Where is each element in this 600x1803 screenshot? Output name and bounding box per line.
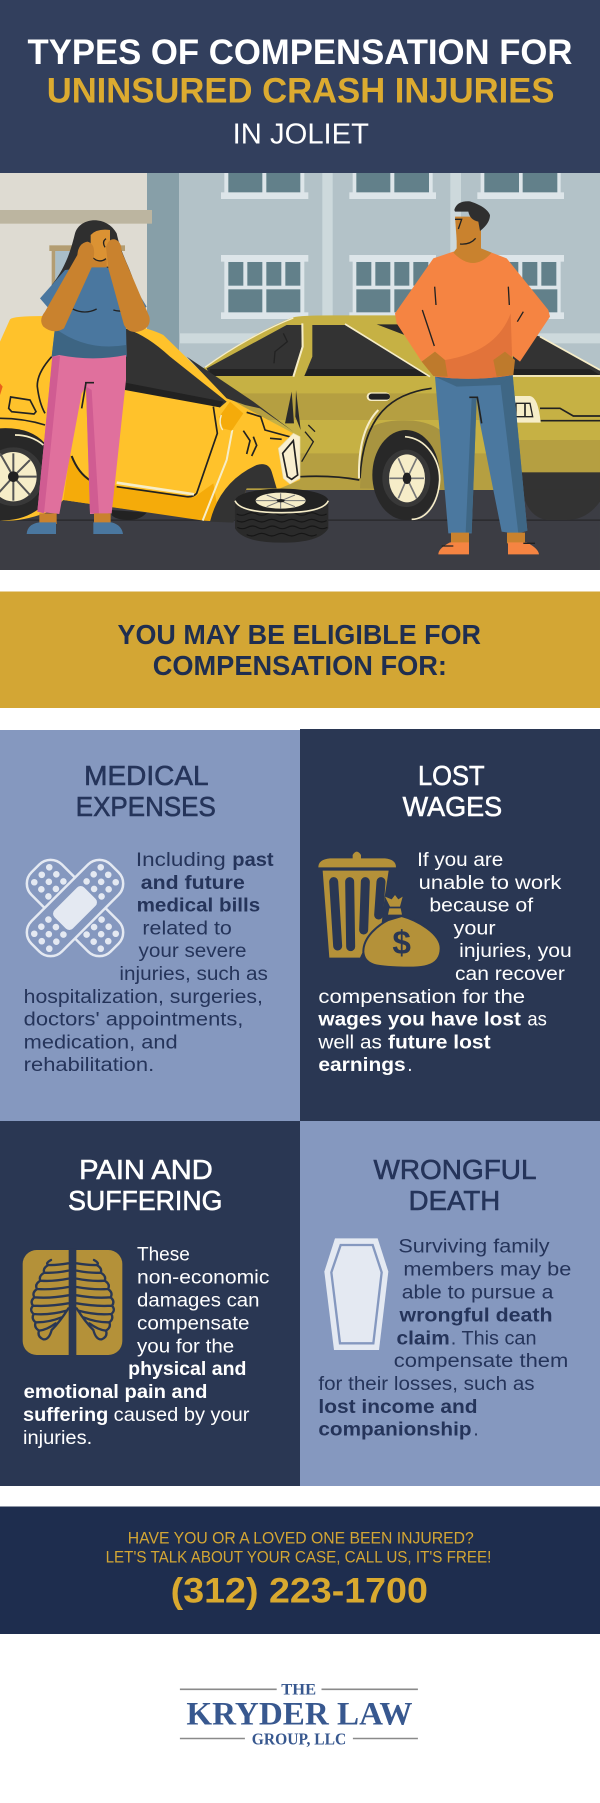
text: wrongful death: members may be <box>403 1260 571 1281</box>
heading: lost wages <box>403 760 502 822</box>
icon: trash can and money bag <box>318 852 441 968</box>
text: pain and suffering: non-economic <box>137 1268 269 1289</box>
phone number: (312) 223-1700 <box>171 1572 428 1611</box>
call to action panel <box>0 1506 600 1634</box>
title: IN JOLIET <box>233 119 369 151</box>
text: medical expenses: medication, and <box>24 1032 178 1053</box>
damage cracks <box>285 390 301 430</box>
heading: pain and suffering <box>68 1154 222 1216</box>
call to action text: HAVE YOU OR A LOVED ONE BEEN INJURED? <box>128 1529 474 1547</box>
heading: medical expenses <box>76 760 216 822</box>
text: lost wages: because of <box>429 896 534 917</box>
text: medical expenses <box>24 850 274 1076</box>
text: pain and suffering: These <box>137 1245 190 1266</box>
heading: wrongful death: WRONGFUL <box>374 1154 536 1185</box>
logo: The Kryder Law Group: THE <box>281 1681 316 1698</box>
icon: rib cage <box>23 1248 122 1357</box>
text: lost wages: can recover <box>455 964 566 985</box>
heading: lost wages: WAGES <box>403 791 502 822</box>
call to action text <box>106 1529 491 1566</box>
text: medical expenses: rehabilitation. <box>24 1055 154 1076</box>
text: pain and suffering: suffering <box>23 1405 108 1426</box>
text: wrongful death: able to pursue a <box>402 1283 554 1304</box>
yellow car <box>0 316 300 523</box>
icon: coffin <box>324 1238 388 1350</box>
text: medical expenses: injuries, such as <box>119 964 268 985</box>
text: lost wages: . <box>407 1055 412 1076</box>
olive car <box>203 315 600 520</box>
text: medical expenses: and future <box>141 873 245 894</box>
text: lost wages: future lost <box>388 1032 491 1053</box>
taillight <box>515 396 600 423</box>
text: pain and suffering <box>23 1245 269 1449</box>
text: medical expenses: your severe <box>138 941 246 962</box>
text: wrongful death: wrongful death <box>398 1306 553 1327</box>
front wheel <box>0 428 45 520</box>
text: lost wages: your <box>454 918 496 939</box>
man <box>395 201 550 554</box>
title <box>28 33 572 151</box>
text: wrongful death <box>318 1237 571 1441</box>
text: wrongful death: lost income and <box>318 1397 478 1418</box>
text: lost wages: unable to work <box>419 873 562 894</box>
text: pain and suffering: caused by your <box>114 1405 250 1426</box>
text: lost wages: well as <box>317 1032 382 1053</box>
header panel <box>0 0 600 173</box>
title: UNINSURED CRASH INJURIES <box>47 72 554 111</box>
text: wrongful death: Surviving family <box>398 1237 550 1258</box>
road <box>0 490 600 570</box>
heading: wrongful death <box>374 1154 536 1216</box>
text: wrongful death: claim <box>396 1328 450 1349</box>
text: pain and suffering: emotional pain and <box>24 1382 207 1403</box>
panel: medical expenses <box>0 730 300 1121</box>
eligibility banner: COMPENSATION FOR: <box>153 650 447 681</box>
logo: The Kryder Law Group <box>180 1681 418 1748</box>
text: lost wages: earnings <box>318 1055 406 1076</box>
text: wrongful death: companionship <box>318 1420 472 1441</box>
heading: lost wages: LOST <box>418 760 485 791</box>
text: wrongful death: for their losses, such as <box>318 1374 535 1395</box>
text: lost wages: compensation for the <box>318 987 525 1008</box>
illustration: car crash scene <box>0 173 600 570</box>
text: medical expenses: doctors' appointments, <box>24 1010 243 1031</box>
panel: wrongful death <box>300 1121 600 1486</box>
logo: The Kryder Law Group: KRYDER LAW <box>186 1697 412 1733</box>
woman <box>27 220 150 534</box>
heading: wrongful death: DEATH <box>409 1185 500 1216</box>
text: lost wages: wages you have lost <box>317 1010 522 1031</box>
text: medical expenses: hospitalization, surgeries, <box>24 987 263 1008</box>
text: pain and suffering: injuries. <box>23 1428 92 1449</box>
logo: The Kryder Law Group: GROUP, LLC <box>252 1730 346 1748</box>
text: wrongful death: . This can <box>451 1328 536 1349</box>
building background <box>0 173 600 506</box>
eligibility banner: YOU MAY BE ELIGIBLE FOR <box>118 619 481 650</box>
text: wrongful death: compensate them <box>394 1351 568 1372</box>
icon: trash can and money bag: $ <box>392 925 411 962</box>
call to action text: LET'S TALK ABOUT YOUR CASE, CALL US, IT'S FREE! <box>106 1548 491 1566</box>
text: medical expenses: past <box>232 850 274 871</box>
eligibility banner <box>0 592 600 708</box>
text: wrongful death: . <box>473 1420 479 1441</box>
bumper piece <box>278 433 300 484</box>
rear wheel <box>372 430 440 520</box>
text: medical expenses: related to <box>142 918 232 939</box>
top windows <box>221 173 564 199</box>
icon: bandage <box>20 853 130 963</box>
text: lost wages: If you are <box>417 850 503 871</box>
heading: medical expenses: EXPENSES <box>76 791 216 822</box>
heading: pain and suffering: PAIN AND <box>79 1154 213 1185</box>
panel: pain and suffering <box>0 1121 300 1486</box>
panel: lost wages <box>300 729 600 1121</box>
text: pain and suffering: compensate <box>137 1314 250 1335</box>
text: lost wages <box>317 850 572 1076</box>
text: pain and suffering: you for the <box>137 1336 234 1357</box>
loose tire <box>235 489 328 543</box>
text: medical expenses: medical bills <box>137 896 260 917</box>
heading: pain and suffering: SUFFERING <box>68 1185 222 1216</box>
heading: medical expenses: MEDICAL <box>84 760 209 791</box>
text: lost wages: as <box>527 1010 547 1031</box>
text: pain and suffering: damages can <box>137 1291 260 1312</box>
text: pain and suffering: physical and <box>128 1359 246 1380</box>
title: TYPES OF COMPENSATION FOR <box>28 33 572 72</box>
text: medical expenses: Including <box>136 850 226 871</box>
text: lost wages: injuries, you <box>459 941 572 962</box>
middle windows <box>221 255 564 319</box>
